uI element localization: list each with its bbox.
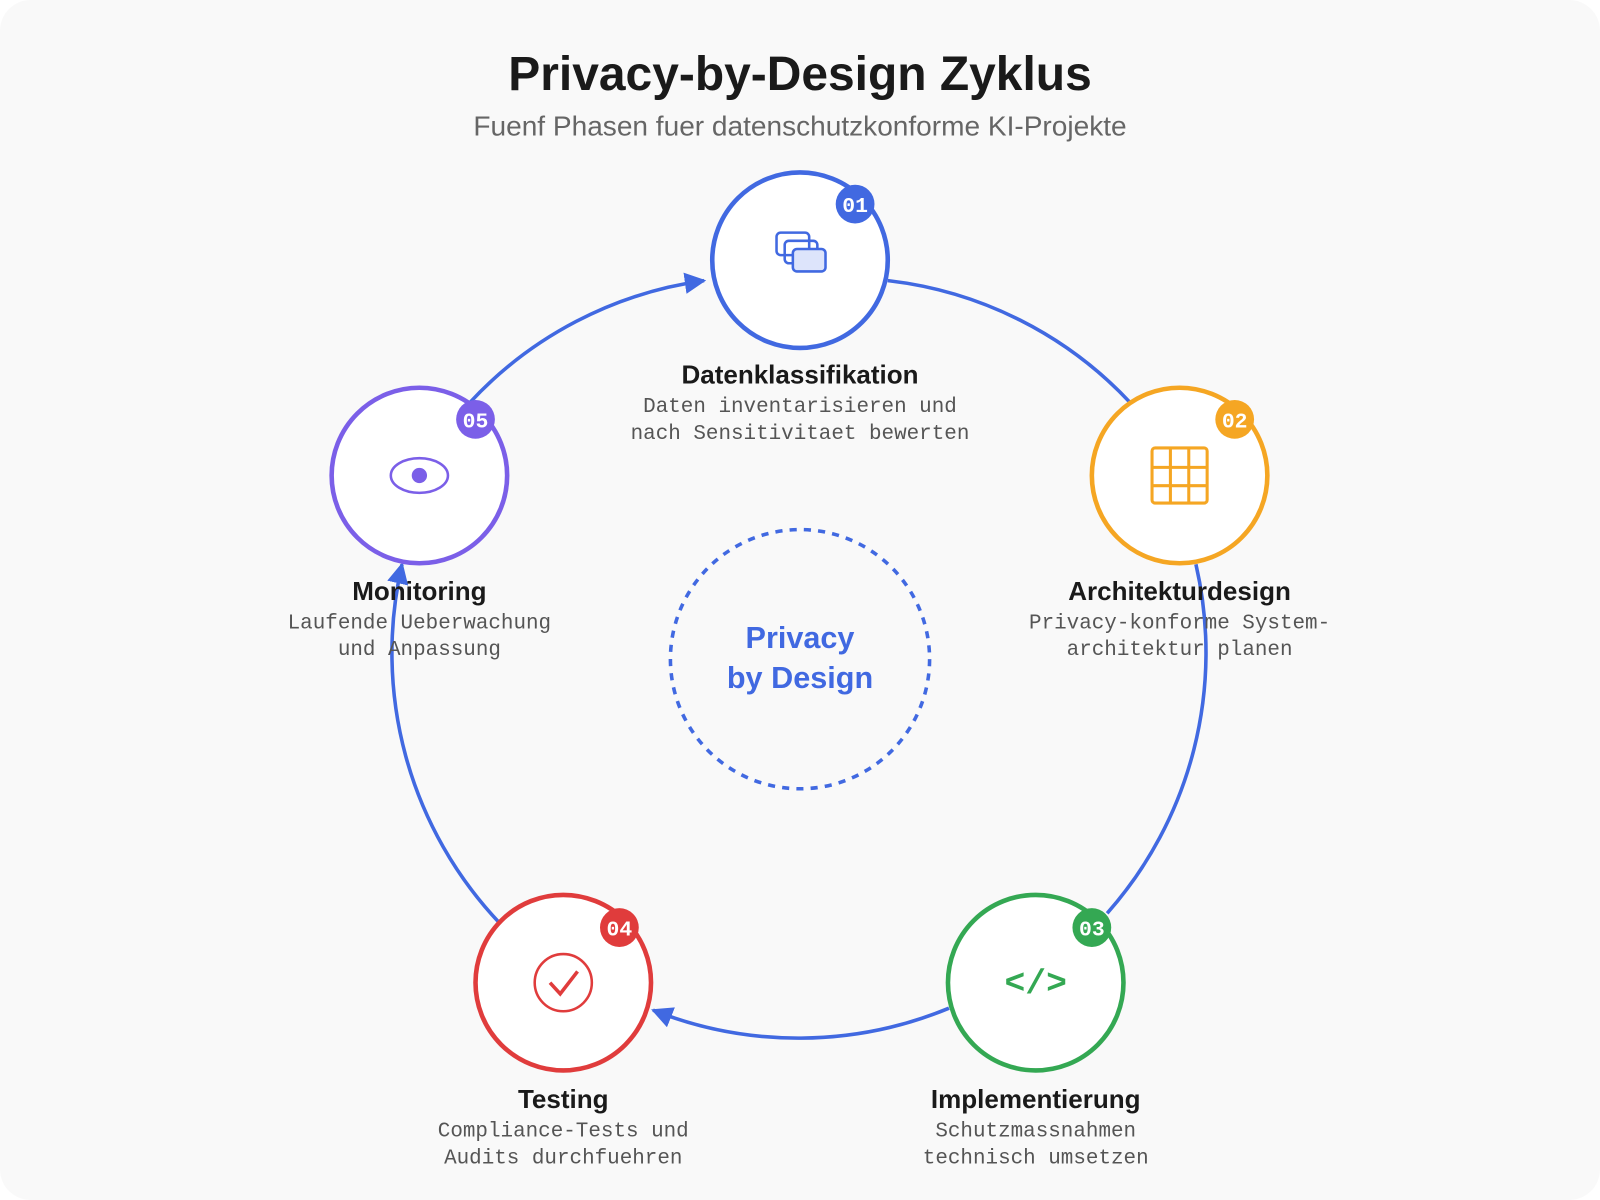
badge 01 bbox=[836, 185, 874, 223]
phase 04: Compliance-Tests und bbox=[438, 1121, 689, 1144]
phase 03: 03 bbox=[1079, 919, 1105, 943]
phase 02: Privacy-konforme System- bbox=[1029, 613, 1330, 636]
phase 02: Architekturdesign bbox=[1068, 576, 1291, 606]
phase 04 bbox=[438, 895, 689, 1170]
phase 05: Monitoring bbox=[352, 576, 487, 606]
icon: eye bbox=[391, 458, 448, 493]
center: privacy by design bbox=[670, 530, 930, 789]
center: privacy by design: by Design bbox=[727, 661, 873, 695]
phase 03: Implementierung bbox=[931, 1084, 1141, 1114]
phase 01: Daten inventarisieren und bbox=[643, 396, 957, 419]
phase 01: nach Sensitivitaet bewerten bbox=[631, 423, 969, 446]
center: privacy by design: Privacy bbox=[746, 621, 854, 655]
phase 05: 05 bbox=[463, 411, 488, 435]
phase 05: und Anpassung bbox=[338, 639, 501, 662]
phase 02: 02 bbox=[1222, 411, 1248, 435]
phase 05: Laufende Ueberwachung bbox=[288, 613, 551, 636]
phase 03 bbox=[923, 895, 1149, 1170]
phase 03: technisch umsetzen bbox=[923, 1147, 1149, 1170]
phase 02 bbox=[1029, 388, 1330, 662]
icon: layers bbox=[777, 233, 826, 271]
title: Privacy-by-Design Zyklus bbox=[508, 48, 1092, 101]
phase 01: 01 bbox=[842, 195, 868, 219]
icon: check bbox=[535, 954, 592, 1011]
phase 01: Datenklassifikation bbox=[681, 360, 919, 390]
phase 02: architektur planen bbox=[1067, 639, 1293, 662]
phase 05 bbox=[288, 388, 551, 662]
phase 04: Testing bbox=[518, 1084, 609, 1114]
icon: code: </> bbox=[1004, 965, 1067, 1004]
phase 04: 04 bbox=[607, 919, 632, 943]
icon: grid bbox=[1152, 448, 1207, 503]
phase 04: Audits durchfuehren bbox=[444, 1147, 682, 1170]
phase 03: Schutzmassnahmen bbox=[935, 1121, 1136, 1144]
cycle ring arrows bbox=[392, 281, 1206, 1038]
phase 01 bbox=[631, 172, 969, 446]
subtitle: Fuenf Phasen fuer datenschutzkonforme KI-Projekte bbox=[473, 111, 1127, 142]
